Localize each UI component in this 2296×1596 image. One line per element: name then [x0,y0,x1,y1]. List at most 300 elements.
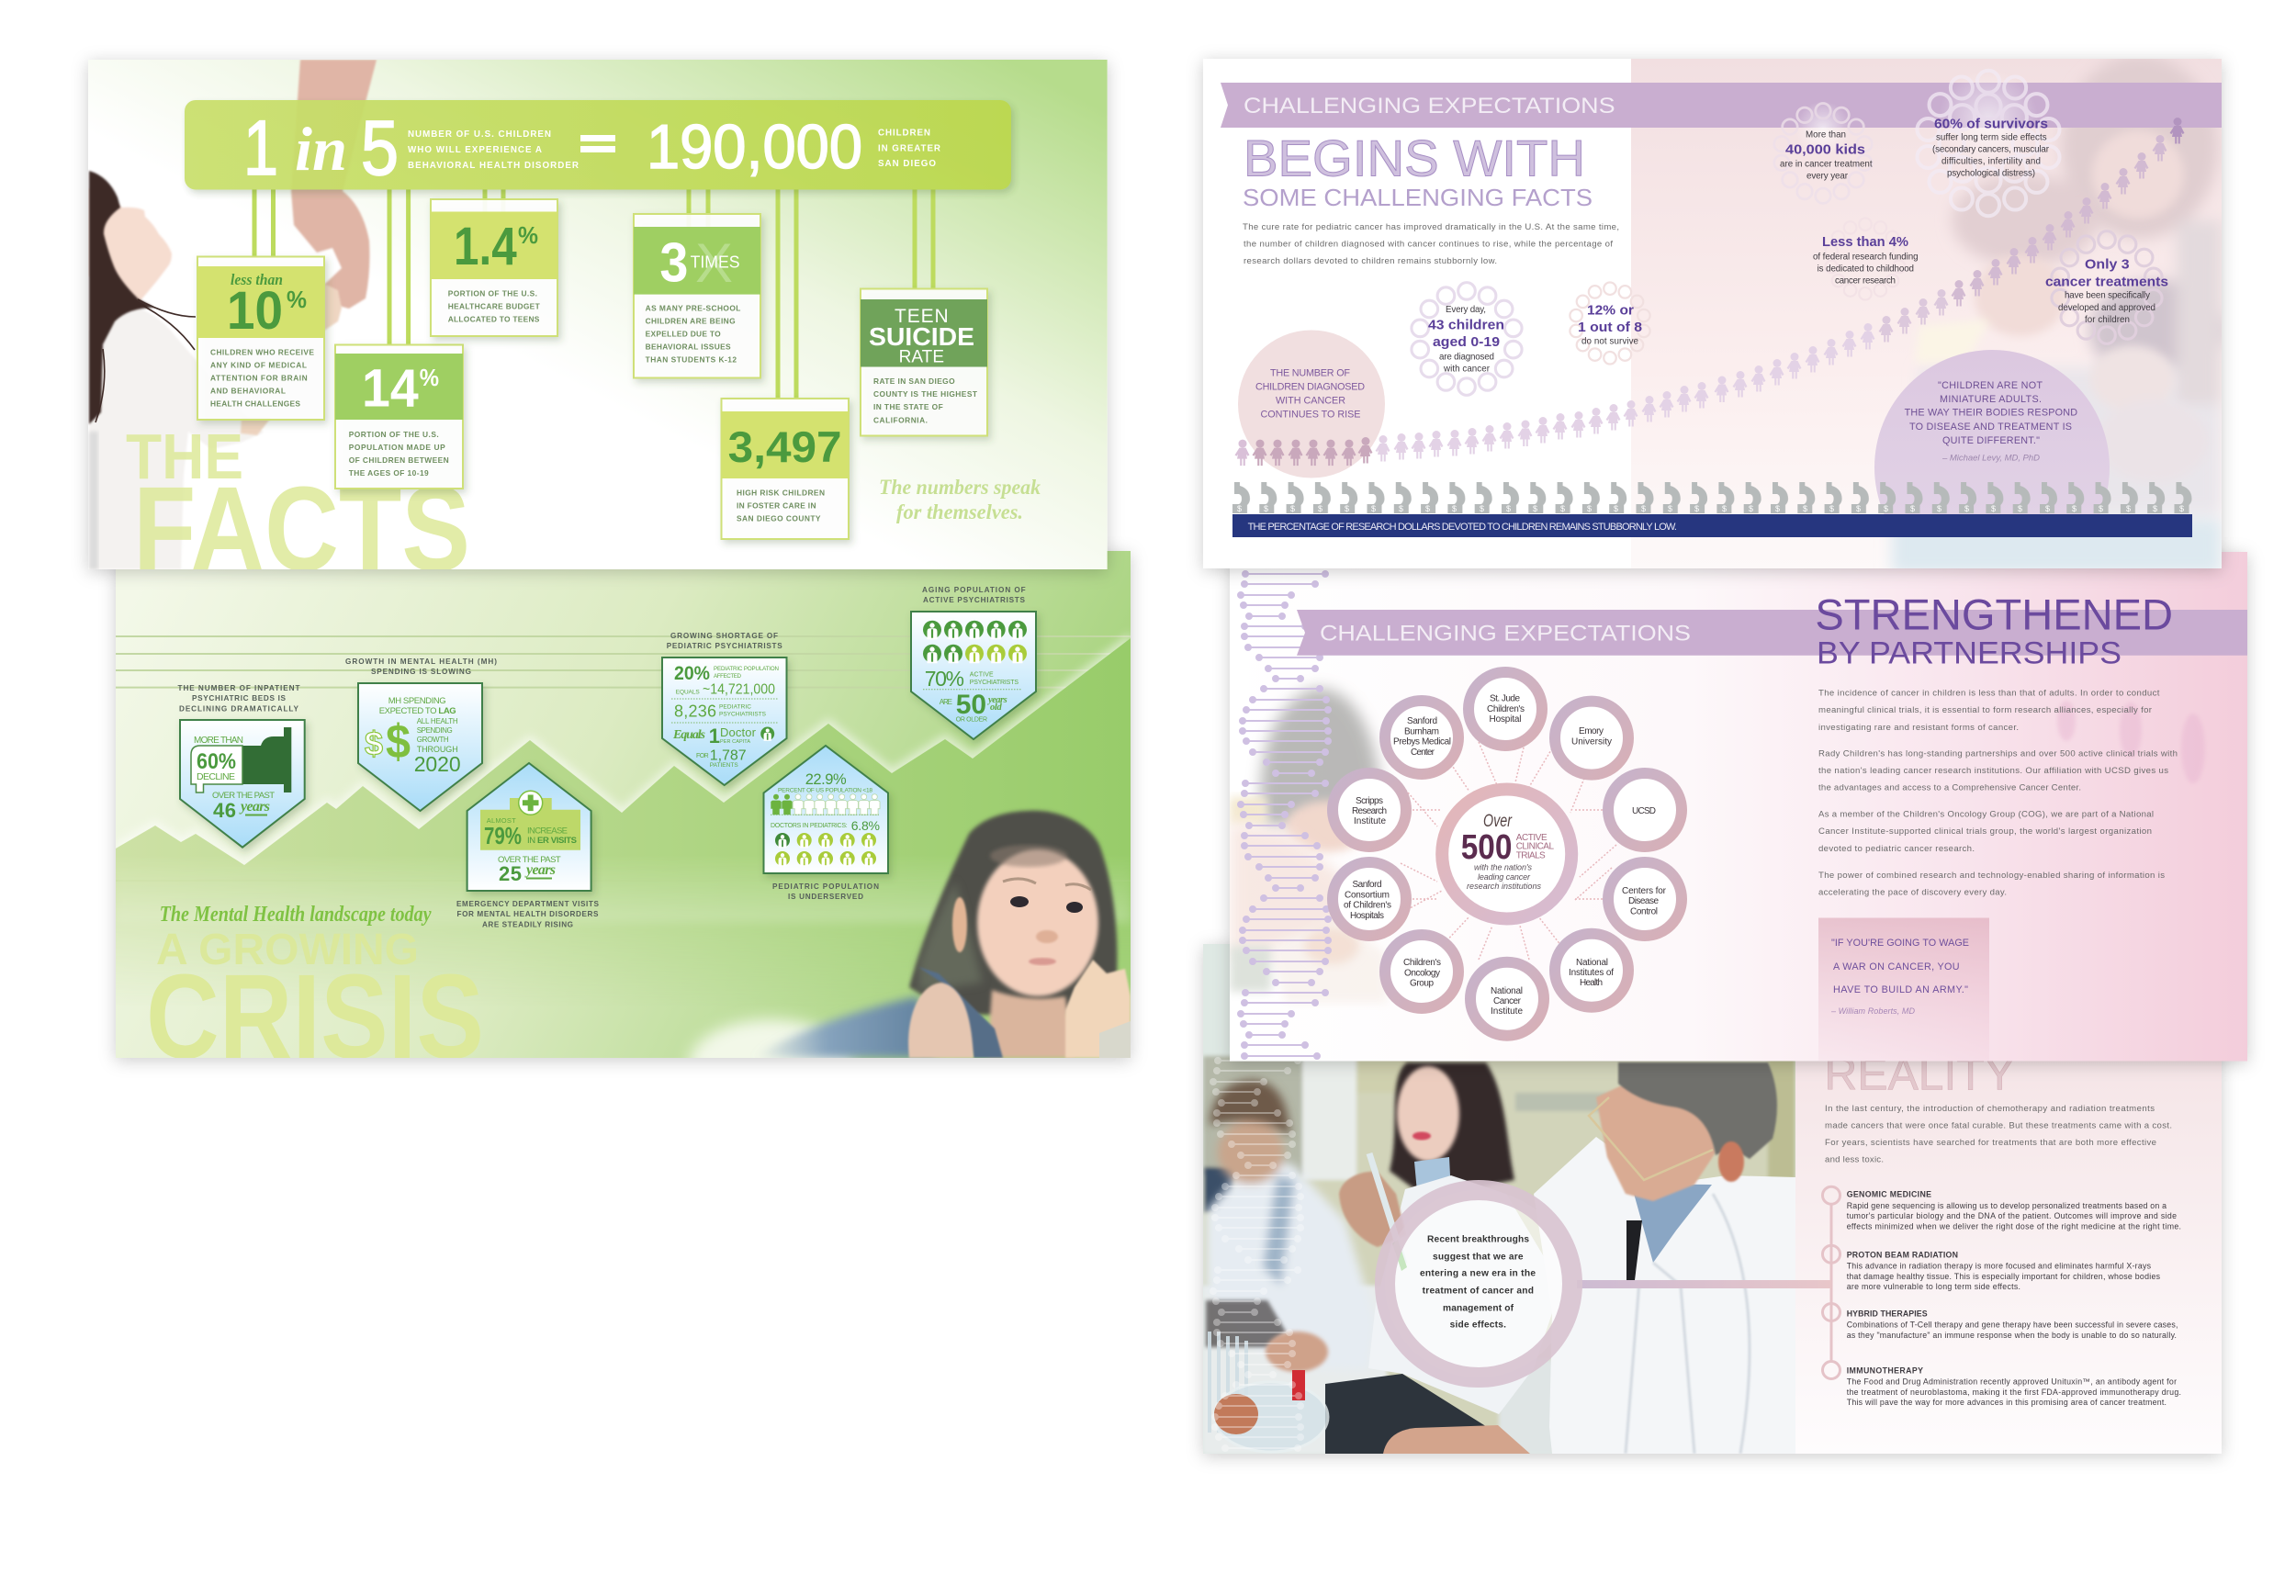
card: teen suicide rate: RATE [899,347,944,366]
item: immunotherapy: IMMUNOTHERAPY [1847,1366,1923,1376]
node: Sanford Burnham Prebys: Center [1411,747,1435,758]
center hub: over 500 active clinical trials: research institutions [1467,882,1541,891]
callout: aging psychiatrists: ARE [940,698,952,706]
card: 1.4 percent: PORTION OF THE U.S. [448,289,537,298]
callout: pediatric population underserved: 6.8% [851,818,880,833]
quote box: – William Roberts, MD [1830,1006,1916,1016]
heading: strengthened by partnerships [1815,590,2173,671]
stat: 40,000 kids: More than [1806,130,1846,140]
callout: emergency department visits: ALMOST [487,816,516,825]
callout: pediatric psychiatrist shortage: FOR [696,753,709,759]
stat: less than 4 percent: of federal research funding [1813,252,1919,263]
callout: pediatric psychiatrist shortage: 1 [709,725,720,747]
card: 3,497: IN FOSTER CARE IN [737,500,816,510]
flower ring: 60 percent of survivors [1917,69,2060,216]
node: National Institutes of Health: National [1576,958,1608,968]
node: St. Jude: Children's [1487,704,1525,714]
icons: psychiatrists grid [923,621,1027,663]
node: Scripps [1333,773,1406,847]
callout: pediatric population underserved: PERCENT OF US POPULATION <18 [778,788,872,793]
callout: aging psychiatrists: years [986,695,1007,705]
quote: children are not miniature adults [1905,380,2077,463]
magnifier circle callout: suggest that we are [1433,1253,1524,1262]
card: less than 10 percent: ANY KIND OF MEDICAL [210,361,307,370]
label [456,900,600,929]
callout: inpatient psychiatric beds: years [239,799,270,815]
panel: a growing crisis [116,551,1131,1111]
item: genomic medicine [1847,1190,2181,1231]
stat: only 3 cancer treatments: cancer treatments [2045,274,2168,290]
callout: mental health spending: GROWTH [417,736,449,744]
quote box: HAVE TO BUILD AN ARMY." [1833,984,1968,995]
body copy: The power of combined research and technology-enabled sharing of information is [1818,871,2165,881]
callout: emergency department visits: INCREASE [527,826,568,836]
icon: dollar signs: $ [386,715,411,769]
node: National Institutes of Health: Institutes of [1569,968,1614,978]
icon: hospital [480,791,580,850]
node: Emory: University [1571,736,1612,747]
label [922,586,1026,604]
callout: pediatric psychiatrist shortage: 8,236 [674,702,716,721]
stat: less than 4 percent: is dedicated to childhood [1818,264,1914,274]
stat: 12 percent: 12% or [1587,303,1634,318]
tagline: the numbers speak [879,476,1041,523]
intro paragraph [1243,222,1619,266]
label [667,632,782,650]
card: teen suicide rate: SUICIDE [869,322,974,351]
card: less than 10 percent: % [287,286,307,313]
heading: strengthened by partnerships: STRENGTHENED [1815,590,2173,638]
body copy: Rady Children's has long-standing partnerships and over 500 active clinical trials with [1818,749,2178,759]
stat: 43 children: 43 children [1428,318,1504,332]
magnifier circle callout [1385,1190,1572,1377]
photo: adult hand [291,60,377,331]
callout: inpatient psychiatric beds: OVER THE PAST [212,791,275,801]
node: Centers for Disease Control: Centers for [1622,886,1667,896]
network diagram: clinical trial partners [1333,672,1682,1036]
callout: inpatient psychiatric beds: MORE THAN [194,736,243,746]
label: PSYCHIATRIC BEDS IS [192,694,287,702]
callout: aging psychiatrists: PSYCHIATRISTS [970,680,1019,686]
navy banner: research dollars [1232,514,2192,537]
callout: pediatric psychiatrist shortage [662,632,786,785]
item: immunotherapy: the treatment of neuroblastoma, making it the first FDA-approved immunotherapy drug. [1847,1388,2181,1397]
card: 14 percent: % [420,364,439,391]
rising line of children [1234,118,2184,466]
callout: pediatric psychiatrist shortage: PSYCHIATRISTS [719,711,767,718]
card: 14 percent: POPULATION MADE UP [349,443,445,452]
card: 3 times: THAN STUDENTS K-12 [646,355,737,365]
stat: 1 in 5: 5 [361,105,399,191]
quote box: "IF YOU'RE GOING TO WAGE [1831,938,1969,949]
flower ring: less than 4 percent [1825,218,1906,300]
stat: 60 percent of survivors: 60% of survivors [1934,116,2048,132]
item: genomic medicine: Rapid gene sequencing is allowing us to develop personalized treatments based on a [1847,1201,2167,1210]
label: AGING POPULATION OF [922,586,1026,594]
node: Children's Oncology Group: Oncology [1404,968,1440,979]
node: Sanford Consortium [1333,862,1406,936]
faint DNA strand overlay [1210,1057,1304,1451]
label [178,684,299,713]
callout: emergency department visits: OVER THE PAST [498,855,561,865]
icon: dollar signs [365,715,411,769]
node: UCSD [1608,773,1682,847]
label: PEDIATRIC PSYCHIATRISTS [667,642,782,650]
label: ARE STEADILY RISING [482,920,573,929]
node: National Institutes of Health [1555,934,1628,1007]
panel: the facts [88,60,1108,596]
item: genomic medicine: effects minimized when we deliver the right dose of the right medicine at the right time. [1847,1221,2181,1231]
card: 14 percent [335,345,463,489]
flower ring: only 3 treatments [2052,231,2162,343]
heading: begins with some challenging facts: BEGINS WITH [1244,129,1585,187]
center hub: over 500 active clinical trials: ACTIVE [1516,833,1548,843]
horizontal chart lines [116,635,1131,689]
body copy: meaningful clinical trials, it is essential to form research alliances, especially for [1818,705,2153,715]
callout: pediatric psychiatrist shortage: 20% [674,663,710,684]
callout: pediatric population underserved: 22.9% [805,771,847,788]
node: Emory: Emory [1579,726,1604,736]
label [345,658,497,676]
label: IS UNDERSERVED [788,893,863,901]
pink circle: diagnosed children [1238,331,1385,478]
heading: strengthened by partnerships: BY PARTNERSHIPS [1817,636,2122,671]
photo: young girl [689,811,1131,1111]
magnifier circle callout: Recent breakthroughs [1427,1234,1529,1245]
photo: mother and baby [1230,689,1387,1003]
pink circle: diagnosed children: WITH CANCER [1276,395,1345,406]
node: National Cancer Institute [1470,962,1544,1036]
intro paragraph: the number of children diagnosed with cancer continues to rise, while the percentage of [1244,239,1613,249]
microscope row [1232,482,2200,513]
callout: pediatric population underserved [764,746,888,901]
intro paragraph: and less toxic. [1825,1155,1884,1164]
body copy: Cancer Institute-supported clinical trials group, the world's largest organization [1818,826,2152,837]
stat: 40,000 kids: 40,000 kids [1785,141,1865,158]
card: 3,497: 3,497 [728,422,842,471]
stat: 60 percent of survivors: psychological distress) [1947,169,2035,178]
callout: mental health spending: EXPECTED TO LAG [379,706,456,716]
callout: pediatric psychiatrist shortage: ~14,721,000 [703,682,775,698]
stat: 40,000 kids: every year [1806,171,1849,182]
label: GROWING SHORTAGE OF [670,632,778,640]
callout: emergency department visits: IN ER VISITS [527,836,577,846]
callout: inpatient psychiatric beds: 46 [213,799,236,822]
card: 1.4 percent: % [518,221,538,249]
callout: emergency department visits [456,763,600,929]
hanging connector lines [254,189,933,399]
body copy: accelerating the pace of discovery every day. [1818,888,2007,898]
item: immunotherapy: This will pave the way for more advances in this promising area of cancer treatment. [1847,1398,2167,1407]
intro paragraph: For years, scientists have searched for treatments that are both more effective [1825,1138,2156,1148]
card: teen suicide rate: IN THE STATE OF [873,402,943,411]
photo: family [1892,55,2227,574]
callout: pediatric psychiatrist shortage: PEDIATRIC POPULATION [714,666,779,672]
callout: pediatric psychiatrist shortage: PEDIATRIC [719,703,751,711]
stat: 43 children: Every day, [1446,305,1486,315]
body copy: the nation's leading cancer research institutions. Our affiliation with UCSD gives us [1818,766,2168,776]
stat: 60 percent of survivors [1932,116,2050,178]
card: less than 10 percent: HEALTH CHALLENGES [210,399,300,409]
node: Sanford Consortium: Consortium [1345,891,1390,900]
callout: inpatient psychiatric beds: 60% [197,749,236,774]
stat: 43 children: aged 0-19 [1433,334,1500,350]
stat: 43 children: are diagnosed [1439,353,1494,362]
mountain line chart [116,632,1131,986]
node: Sanford Burnham Prebys: Prebys Medical [1393,736,1451,747]
callout: aging psychiatrists: 70% [925,667,964,691]
label: PEDIATRIC POPULATION [772,882,879,891]
stat: 60 percent of survivors: difficulties, infertility and [1941,156,2041,167]
node: Sanford Burnham Prebys: Sanford [1407,716,1437,726]
item: proton beam radiation: PROTON BEAM RADIATION [1847,1251,1958,1260]
item: proton beam radiation [1847,1251,2161,1291]
stat: only 3 cancer treatments: for children [2085,315,2130,325]
heading: the mental health landscape today: The Mental Health landscape today [160,903,432,927]
body copy: investigating rare and resistant forms of cancer. [1818,723,2019,733]
card: 3 times: X [695,232,733,294]
heading: the mental health landscape today: CRISIS [146,949,484,1084]
callout: aging psychiatrists: ACTIVE [970,672,994,678]
icon: hospital bed [242,727,291,792]
stat: 1 in 5: in [295,114,347,184]
card: teen suicide rate: TEEN [895,306,949,327]
card: 1.4 percent: HEALTHCARE BUDGET [448,302,541,311]
magnifier circle callout: side effects. [1450,1321,1506,1330]
stat: less than 4 percent [1813,234,1919,287]
card: 14 percent: PORTION OF THE U.S. [349,430,439,439]
body copy: the advantages and access to a Comprehensive Cancer Center. [1818,783,2081,793]
panel: reality [1196,938,2230,1464]
stat: only 3 cancer treatments: developed and approved [2058,303,2155,313]
node: Children's Oncology Group [1385,935,1458,1008]
banner: 1 in 5 equals 190,000 [185,100,1011,191]
callout: inpatient psychiatric beds [178,684,305,848]
center hub: over 500 active clinical trials: leading cancer [1478,872,1531,882]
intro paragraph: made cancers that were once fatal curable. But these treatments came with a cost. [1825,1120,2172,1131]
callout: pediatric psychiatrist shortage: PER CAPITA [720,739,750,745]
card: 3 times: AS MANY PRE-SCHOOL [646,304,740,313]
card: 3 times: BEHAVIORAL ISSUES [646,343,731,352]
card: less than 10 percent: less than [231,271,283,288]
ribbon: challenging expectations: CHALLENGING EXPECTATIONS [1244,94,1615,118]
card: teen suicide rate: CALIFORNIA. [873,416,928,425]
title: the facts: FACTS [133,461,470,596]
card: less than 10 percent: AND BEHAVIORAL [210,387,286,396]
center hub: over 500 active clinical trials: Over [1483,812,1512,831]
card: teen suicide rate [861,288,987,435]
stat: 12 percent: do not survive [1581,336,1639,347]
card: teen suicide rate: RATE IN SAN DIEGO [873,377,955,386]
card: less than 10 percent: ATTENTION FOR BRAIN [210,374,308,383]
center hub: over 500 active clinical trials: with the nation's [1474,863,1532,872]
stat: less than 4 percent: Less than 4% [1822,234,1908,250]
node: Children's Oncology Group: Group [1410,979,1434,988]
stat: only 3 cancer treatments: Only 3 [2085,257,2130,272]
text column background [1795,1061,2222,1454]
node: Sanford Consortium: Sanford [1352,880,1381,890]
pink circle: diagnosed children: THE NUMBER OF [1270,367,1350,378]
panel: strengthened by partnerships [1230,552,2247,1062]
callout: pediatric psychiatrist shortage: AFFECTED [714,673,742,680]
node: Sanford Burnham Prebys [1385,701,1458,774]
flower ring: 12 percent [1570,282,1650,365]
intro paragraph: The cure rate for pediatric cancer has improved dramatically in the U.S. At the same time, [1243,222,1619,232]
caption: children in greater san diego: SAN DIEGO [878,159,936,169]
magnifier circle callout: management of [1443,1304,1514,1313]
stat: 43 children: with cancer [1443,364,1491,375]
card: 1.4 percent: 1.4 [454,217,517,276]
label: FOR MENTAL HEALTH DISORDERS [457,910,599,918]
pink background field [1631,59,2222,568]
stat: less than 4 percent: cancer research [1835,275,1896,287]
card: 14 percent: 14 [362,359,419,419]
ribbon: challenging expectations: CHALLENGING EXPECTATIONS [1320,621,1691,646]
caption: behavioral health disorder: BEHAVIORAL HEALTH DISORDER [408,161,579,171]
flower ring: 40,000 kids [1774,101,1872,203]
navy banner: research dollars: THE PERCENTAGE OF RESEARCH DOLLARS DEVOTED TO CHILDREN REMAINS STUBBORNLY LOW. [1248,522,1677,533]
stat: 60 percent of survivors: suffer long term side effects [1936,132,2047,143]
card: 1.4 percent [431,199,557,336]
callout: mental health spending: ALL HEALTH [417,717,458,725]
caption: children in greater san diego [878,129,940,169]
photo: scientists in the lab [1203,1056,1795,1454]
node: National Cancer Institute: Cancer [1493,996,1522,1006]
body copy: As a member of the Children's Oncology Group (COG), we are part of a National [1818,810,2154,820]
item: hybrid therapies: as they "manufacture" an immune response when the body is unable to do so naturally. [1847,1331,2177,1340]
node: Centers for Disease Control [1608,862,1682,936]
callout: pediatric psychiatrist shortage: Equals [672,728,706,742]
equals sign [580,135,615,152]
node: Sanford Consortium: Hospitals [1350,911,1384,921]
center hub: over 500 active clinical trials [1442,790,1571,918]
intro paragraph: In the last century, the introduction of chemotherapy and radiation treatments [1825,1104,2155,1114]
node: Sanford Burnham Prebys: Burnham [1404,727,1439,736]
node: St. Jude: Hospital [1490,714,1521,725]
item: immunotherapy [1847,1366,2181,1407]
item: proton beam radiation: are more vulnerable to long term side effects. [1847,1282,2020,1291]
stat: 12 percent: 1 out of 8 [1578,320,1642,335]
node: Centers for Disease Control: Control [1630,907,1658,916]
center hub: over 500 active clinical trials: TRIALS [1516,850,1546,861]
title: the facts: THE [126,421,243,492]
icon: doctor [760,727,774,741]
card: 3 times: CHILDREN ARE BEING [646,317,736,326]
heading: the mental health landscape today [151,905,480,1058]
callout: inpatient psychiatric beds: DECLINE [197,771,235,782]
label: ACTIVE PSYCHIATRISTS [923,596,1026,604]
callout: pediatric psychiatrist shortage: EQUALS [676,689,700,696]
tagline: the numbers speak: for themselves. [896,500,1023,523]
node: Children's Oncology Group: Children's [1403,958,1441,968]
stat: 1 in 5 [243,105,399,191]
label: EMERGENCY DEPARTMENT VISITS [456,900,600,908]
DNA strand [1241,574,1328,1056]
node: Scripps: Research [1352,806,1387,816]
intro paragraph: research dollars devoted to children remains stubbornly low. [1244,256,1497,266]
timeline of treatments [1822,1186,2181,1407]
card: 14 percent: OF CHILDREN BETWEEN [349,455,449,465]
node: UCSD: UCSD [1632,806,1656,816]
icon: dollar signs: $ [365,725,383,762]
card: less than 10 percent [197,257,324,420]
caption: children in greater san diego: CHILDREN [878,129,930,138]
card: teen suicide rate: COUNTY IS THE HIGHEST [873,389,978,399]
stat: 40,000 kids [1780,130,1873,182]
node: National Institutes of Health: Health [1580,978,1603,988]
callout: mental health spending: MH SPENDING [388,696,446,706]
callout: pediatric psychiatrist shortage: 1,787 [710,747,747,764]
dashed connectors [1391,742,1616,960]
item: proton beam radiation: This advance in radiation therapy is more focused and eliminates harmful X-rays [1847,1262,2152,1271]
heading: the mental health landscape today: A GROWING [156,926,419,974]
card: less than 10 percent: CHILDREN WHO RECEIVE [210,348,314,357]
item: genomic medicine: tumor's particular biology and the DNA of the patient. Outcomes will improve and side [1847,1211,2177,1220]
callout: emergency department visits: years [524,862,556,878]
center hub: over 500 active clinical trials: 500 [1461,828,1512,867]
item: hybrid therapies [1847,1309,2178,1340]
callout: pediatric population underserved: DOCTORS IN PEDIATRICS: [771,823,848,829]
card: 3,497: SAN DIEGO COUNTY [737,514,821,523]
callout: mental health spending: SPENDING [417,726,453,735]
stat: only 3 cancer treatments: have been specifically [2065,290,2150,301]
node: National Cancer Institute: National [1491,986,1523,996]
node: Emory [1555,702,1628,775]
body copy: devoted to pediatric cancer research. [1818,844,1975,854]
quote: children are not miniature adults: – Michael Levy, MD, PhD [1941,454,2040,463]
body copy [1818,689,2178,898]
node: St. Jude: St. Jude [1490,694,1520,703]
quote: children are not miniature adults: QUITE DIFFERENT." [1942,435,2040,446]
caption: children in greater san diego: IN GREATER [878,143,940,154]
node: Scripps: Scripps [1356,796,1383,806]
stat: 12 percent [1578,303,1642,347]
quote box [1818,918,1989,1061]
callout: pediatric psychiatrist shortage: PATIENTS [710,762,738,769]
intro paragraph [1825,1104,2172,1164]
title: the facts [127,434,467,569]
ribbon: challenging expectations [1297,610,2247,656]
icons: population row [771,794,880,815]
quote: children are not miniature adults: MINIATURE ADULTS. [1940,394,2042,405]
magnifier circle callout: entering a new era in the [1420,1269,1536,1278]
microscope row: $$$$$$$$$$$$$$$$$$$$$$$$$$$$$$$$$$$$ [1237,504,2184,513]
stat: 1 in 5: 1 [243,105,278,191]
stat: 40,000 kids: are in cancer treatment [1780,160,1873,169]
callout: aging psychiatrists: old [990,702,1002,713]
callout: aging psychiatrists: OR OLDER [956,716,987,724]
callout: mental health spending: 2020 [414,752,461,776]
card: 3,497: HIGH RISK CHILDREN [737,489,825,498]
card: less than 10 percent: 10 [227,281,283,341]
card: 3 times: TIMES [691,253,740,272]
node: Scripps: Institute [1354,816,1386,826]
quote: children are not miniature adults: "CHILDREN ARE NOT [1938,380,2043,391]
node: St. Jude [1469,672,1542,746]
quote circle background [1874,350,2110,585]
quote box: A WAR ON CANCER, YOU [1833,961,1960,972]
caption: behavioral health disorder: WHO WILL EXPERIENCE A [408,145,542,155]
item: proton beam radiation: that damage healthy tissue. This is especially important for children, whose bodies [1847,1272,2161,1281]
card: 3,497 [722,399,849,539]
callout: pediatric psychiatrist shortage: Doctor [720,725,757,739]
pink circle: diagnosed children: CONTINUES TO RISE [1260,410,1361,421]
card: 3 times: 3 [659,231,688,294]
item: genomic medicine: GENOMIC MEDICINE [1847,1190,1931,1199]
callout: emergency department visits: 79% [484,822,522,849]
node: National Cancer Institute: Institute [1491,1006,1523,1017]
caption: behavioral health disorder [408,129,579,171]
